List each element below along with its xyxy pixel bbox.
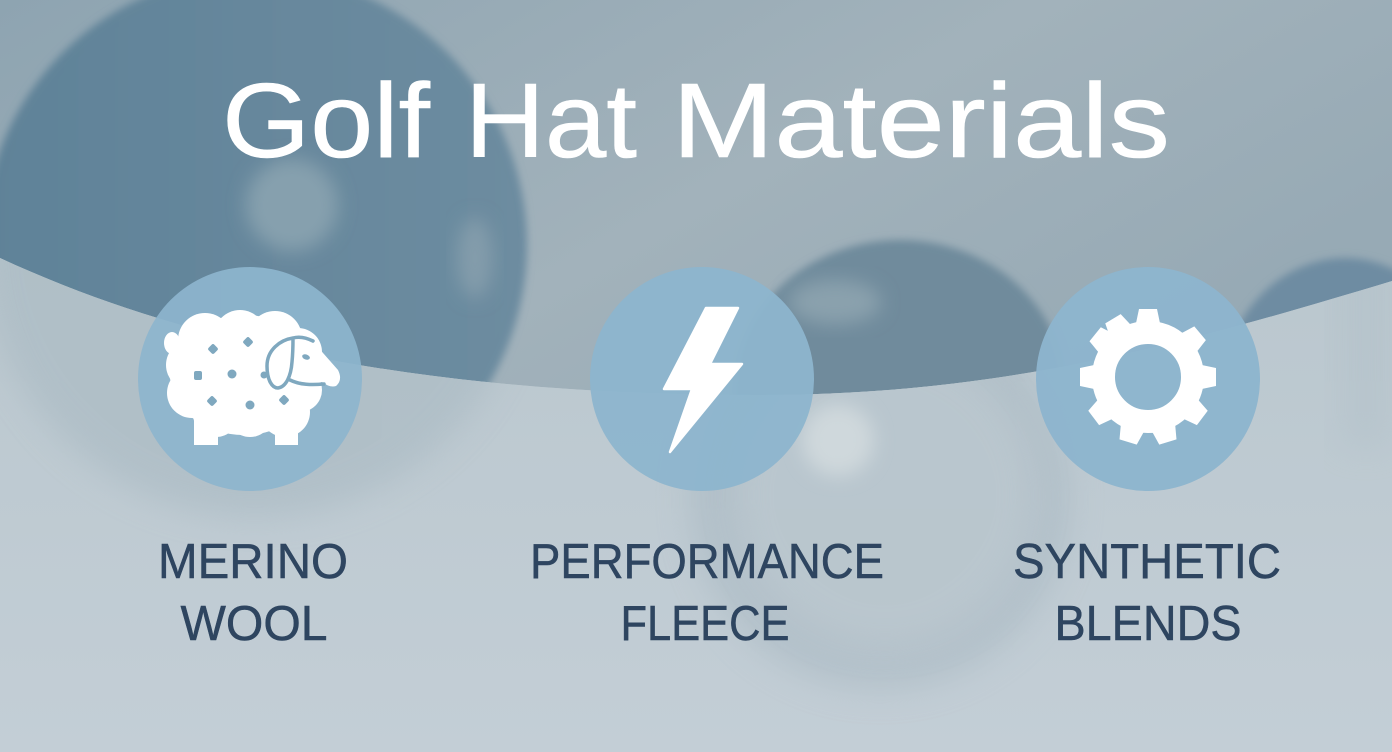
icon circle: synthetic blends (1036, 267, 1260, 491)
material: merino wool (138, 267, 362, 651)
background: upper blurred photo band (0, 0, 1392, 394)
background: lower light curved panel (0, 258, 1392, 752)
material: synthetic blends (1013, 267, 1281, 651)
label: merino wool: WOOL (180, 597, 328, 651)
icon: sheep (164, 310, 340, 445)
title (222, 62, 1170, 180)
title: Materials (672, 62, 1170, 180)
label: merino wool (158, 535, 348, 651)
label: synthetic blends: SYNTHETIC (1013, 535, 1281, 589)
icon circle: merino wool (138, 267, 362, 491)
icon circle: performance fleece (590, 267, 814, 491)
icon: lightning bolt (664, 308, 742, 452)
label: merino wool: MERINO (158, 535, 348, 589)
label: performance fleece: PERFORMANCE (530, 535, 884, 589)
label: performance fleece: FLEECE (620, 597, 790, 651)
label: synthetic blends (1013, 535, 1281, 651)
title: Hat (465, 62, 637, 180)
icon: gear (1080, 309, 1216, 446)
label: performance fleece (530, 535, 884, 651)
title: Golf (222, 62, 431, 180)
material: performance fleece (530, 267, 884, 651)
label: synthetic blends: BLENDS (1054, 597, 1242, 651)
